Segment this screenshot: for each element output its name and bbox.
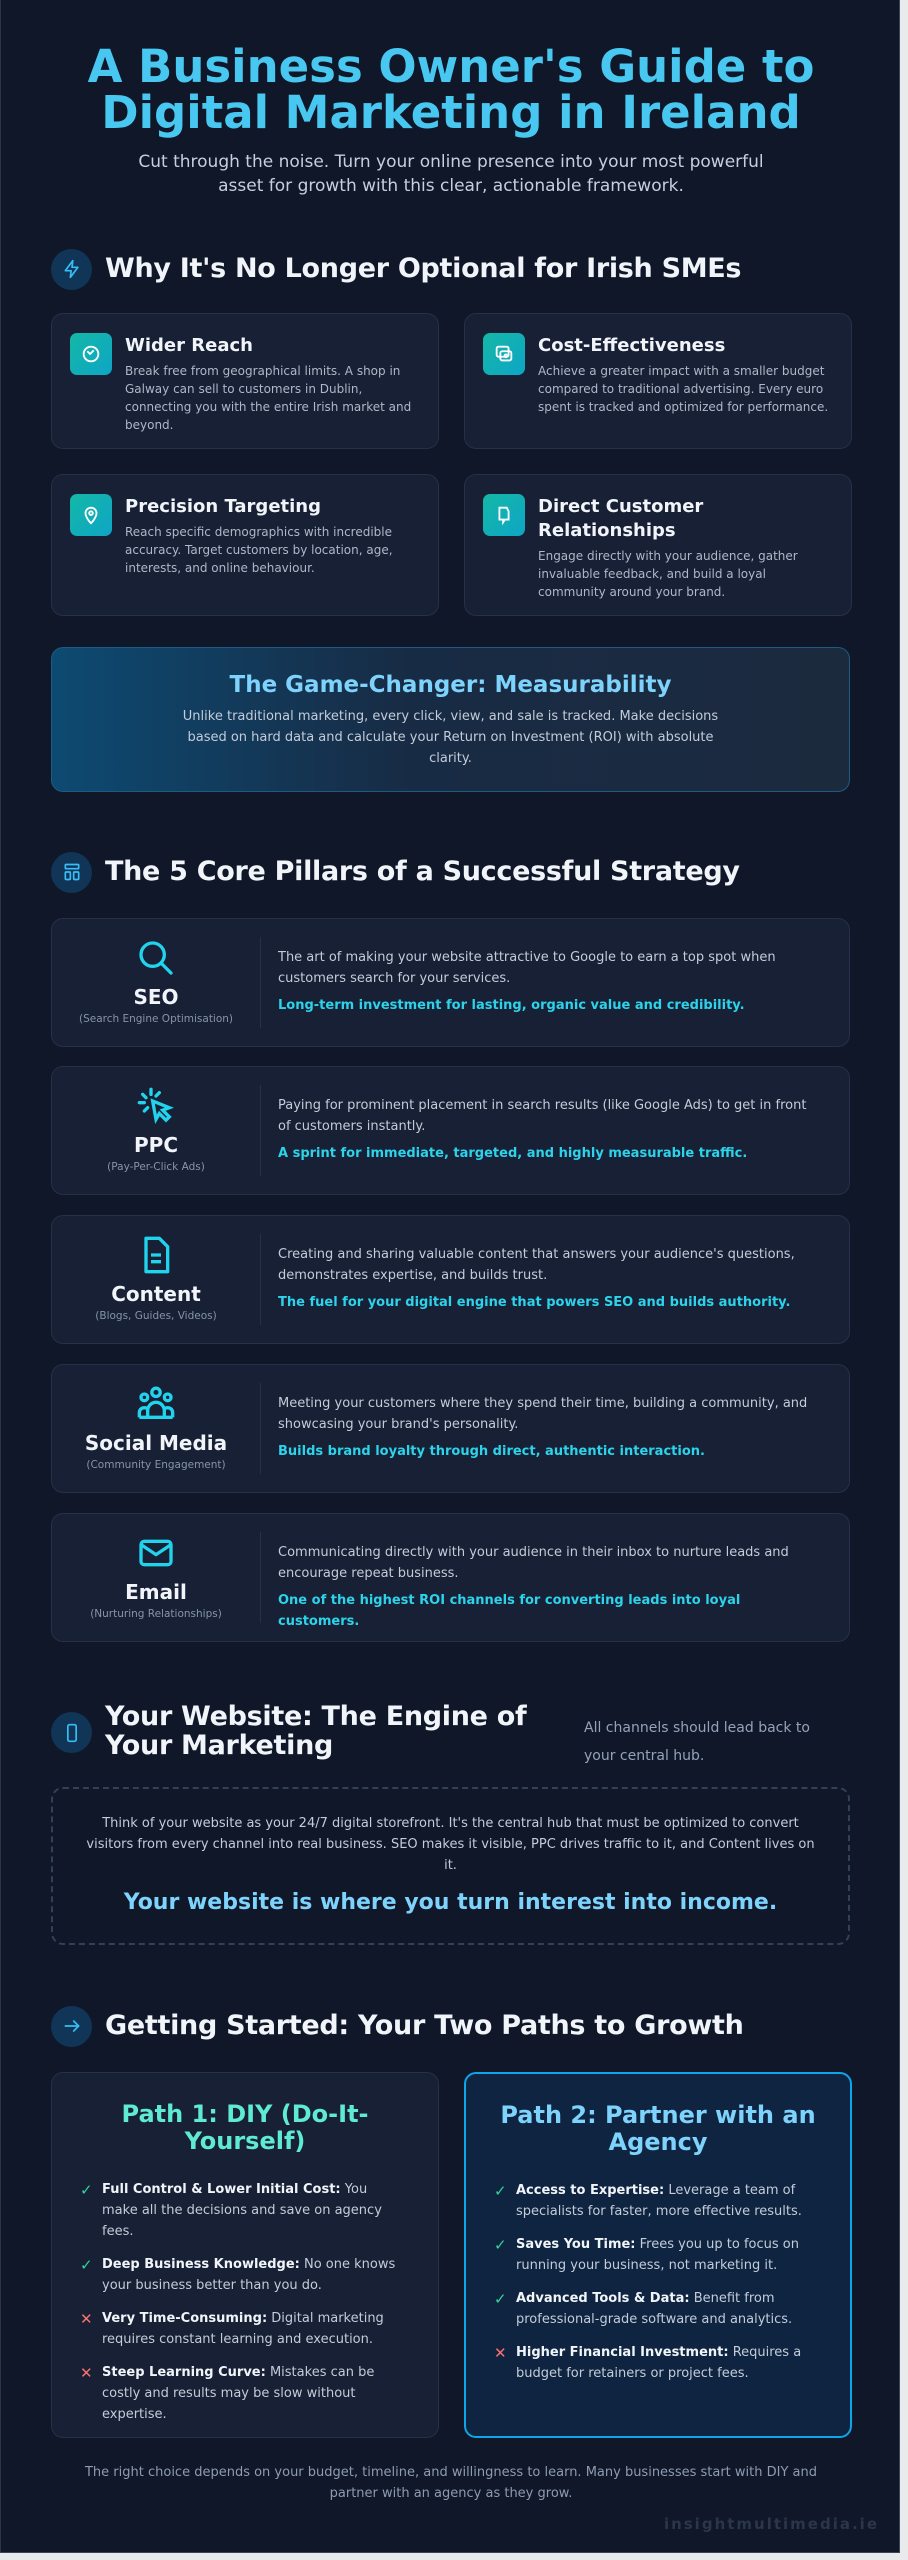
panel: path 1 DIY: Yourself) [185,2127,305,2155]
subtitle: Cut through the noise. Turn your online presence into your most powerful asset for growth with this clear, actionable framework. [138,152,764,196]
panel: path 1 DIY: ✕ [80,2364,93,2382]
title: Digital Marketing in Ireland [101,86,801,139]
panel: social media: Builds brand loyalty through direct, authentic interaction. [278,1444,705,1459]
side note: All channels should lead back to your central hub. [584,1720,810,1764]
dashed hub box [51,1787,850,1945]
panel: social media: Social Media [85,1431,227,1455]
panel: path 2 agency: ✕ [494,2344,507,2362]
panel: PPC [51,1066,850,1195]
callout: measurability: Unlike traditional marketing, every click, view, and sale is tracked. Make decisions based on hard data and calculate your Return on Investment (ROI) with absolute clarity. [183,709,718,766]
icon: chat [483,494,525,536]
icon: globe hand [70,333,112,375]
panel: path 1 DIY: ✕ [80,2310,93,2328]
panel: wider reach: Break free from geographical limits. A shop in Galway can sell to customers in Dublin, connecting you with the entire Irish market and beyond. [125,364,411,432]
panel: content: (Blogs, Guides, Videos) [95,1310,217,1322]
panel: wider reach: Wider Reach [125,335,253,356]
panel: PPC: (Pay-Per-Click Ads) [107,1161,205,1173]
panel: precision targeting: Reach specific demographics with incredible accuracy. Target customers by location, age, interests, and online behaviour. [125,525,393,575]
icon: pin [70,494,112,536]
panel: path 1 DIY: Full Control & Lower Initial Cost: You make all the decisions and save on agency fees. [102,2182,382,2239]
section heading: two paths [51,2006,744,2047]
panel: PPC: A sprint for immediate, targeted, and highly measurable traffic. [278,1146,747,1161]
panel: path 2 agency: Path 2: Partner with an [500,2101,816,2129]
section heading: why [51,249,741,290]
panel: path 1 DIY: Steep Learning Curve: Mistakes can be costly and results may be slow without expertise. [102,2365,374,2422]
panel: path 1 DIY: Very Time-Consuming: Digital marketing requires constant learning and execution. [102,2311,384,2347]
panel: email [51,1513,850,1642]
callout: measurability: The Game-Changer: Measurability [230,672,671,698]
dashed hub box: Think of your website as your 24/7 digital storefront. It's the central hub that must be optimized to convert visitors from every channel into real business. SEO makes it visible, PPC drives traffic to it, and Content lives on it. [86,1816,815,1873]
section heading: why: Why It's No Longer Optional for Irish SMEs [105,253,741,284]
panel: precision targeting: Precision Targeting [125,496,321,517]
section heading: pillars [51,852,740,893]
panel: path 2 agency: ✓ [494,2236,507,2254]
panel: content: Creating and sharing valuable content that answers your audience's questions, demonstrates expertise, and builds trust. [278,1247,795,1283]
footer note: The right choice depends on your budget, timeline, and willingness to learn. Many businesses start with DIY and partner with an agency as they grow. [85,2465,817,2501]
section heading: two paths: Getting Started: Your Two Paths to Growth [105,2010,744,2041]
panel: social media [51,1364,850,1493]
panel: social media: (Community Engagement) [86,1459,226,1471]
panel: email: Email [125,1580,187,1604]
panel: content: The fuel for your digital engine that powers SEO and builds authority. [278,1295,790,1310]
title [88,40,814,139]
icon: money [483,333,525,375]
heading text: Your Website: The Engine of Your Marketing [105,1701,526,1761]
watermark: insightmultimedia.ie [664,2515,879,2533]
panel: direct relationships: Engage directly with your audience, gather invaluable feedback, and build a loyal community around your brand. [538,549,798,599]
icon: envelope [139,1540,173,1566]
panel: email: (Nurturing Relationships) [90,1608,222,1620]
panel: PPC: Paying for prominent placement in search results (like Google Ads) to get in front of customers instantly. [278,1098,806,1134]
icon: phone [51,1712,92,1753]
section heading: website [51,1701,810,1764]
title: A Business Owner's Guide to [88,40,814,93]
panel: cost effectiveness: Achieve a greater impact with a smaller budget compared to traditional advertising. Every euro spent is tracked and optimized for performance. [538,364,828,414]
panel: wider reach [51,313,439,449]
icon: document [144,1236,170,1274]
panel: direct relationships [464,474,852,616]
panel: social media: Meeting your customers where they spend their time, building a community, and showcasing your brand's personality. [278,1396,807,1432]
panel: path 2 agency: ✓ [494,2290,507,2308]
panel: path 1 DIY: ✓ [80,2256,93,2274]
panel: path 2 agency: Saves You Time: Frees you up to focus on running your business, not marketing it. [516,2237,799,2273]
section heading: pillars: The 5 Core Pillars of a Successful Strategy [105,856,740,887]
panel: path 2 agency [464,2072,852,2438]
panel: path 2 agency: Agency [608,2128,708,2156]
panel: direct relationships: Direct Customer Relationships [538,496,703,541]
panel: path 1 DIY [51,2072,439,2438]
panel: precision targeting [51,474,439,616]
dashed hub box: Your website is where you turn interest into income. [124,1890,777,1915]
panel: email: One of the highest ROI channels for converting leads into loyal customers. [278,1593,740,1629]
panel: SEO: The art of making your website attractive to Google to earn a top spot when customers search for your services. [278,950,776,986]
panel: cost effectiveness: Cost-Effectiveness [538,335,725,356]
panel: path 2 agency: Higher Financial Investment: Requires a budget for retainers or project fees. [516,2345,801,2381]
callout: measurability [51,647,850,792]
icon: layout [51,852,92,892]
panel: path 1 DIY: ✓ [80,2181,93,2199]
panel: SEO: Long-term investment for lasting, organic value and credibility. [278,998,745,1013]
panel: email: Communicating directly with your audience in their inbox to nurture leads and encourage repeat business. [278,1545,789,1581]
panel: content [51,1215,850,1344]
panel: SEO: SEO [133,985,179,1009]
panel: path 2 agency: Access to Expertise: Leverage a team of specialists for faster, more effective results. [516,2183,802,2219]
panel: path 1 DIY: Deep Business Knowledge: No one knows your business better than you do. [102,2257,395,2293]
icon: lightning [51,248,92,290]
panel: content: Content [111,1282,201,1306]
panel: SEO [51,918,850,1047]
panel: path 2 agency: Advanced Tools & Data: Benefit from professional-grade software and analytics. [516,2291,792,2327]
icon: arrow [51,2006,92,2046]
panel: path 2 agency: ✓ [494,2182,507,2200]
panel: path 1 DIY: Path 1: DIY (Do-It- [122,2100,368,2128]
panel: SEO: (Search Engine Optimisation) [79,1013,233,1025]
panel: PPC: PPC [134,1133,178,1157]
icon: people [138,1386,174,1419]
icon: cursor click [138,1088,174,1124]
panel: cost effectiveness [464,313,852,449]
icon: search [139,941,173,975]
